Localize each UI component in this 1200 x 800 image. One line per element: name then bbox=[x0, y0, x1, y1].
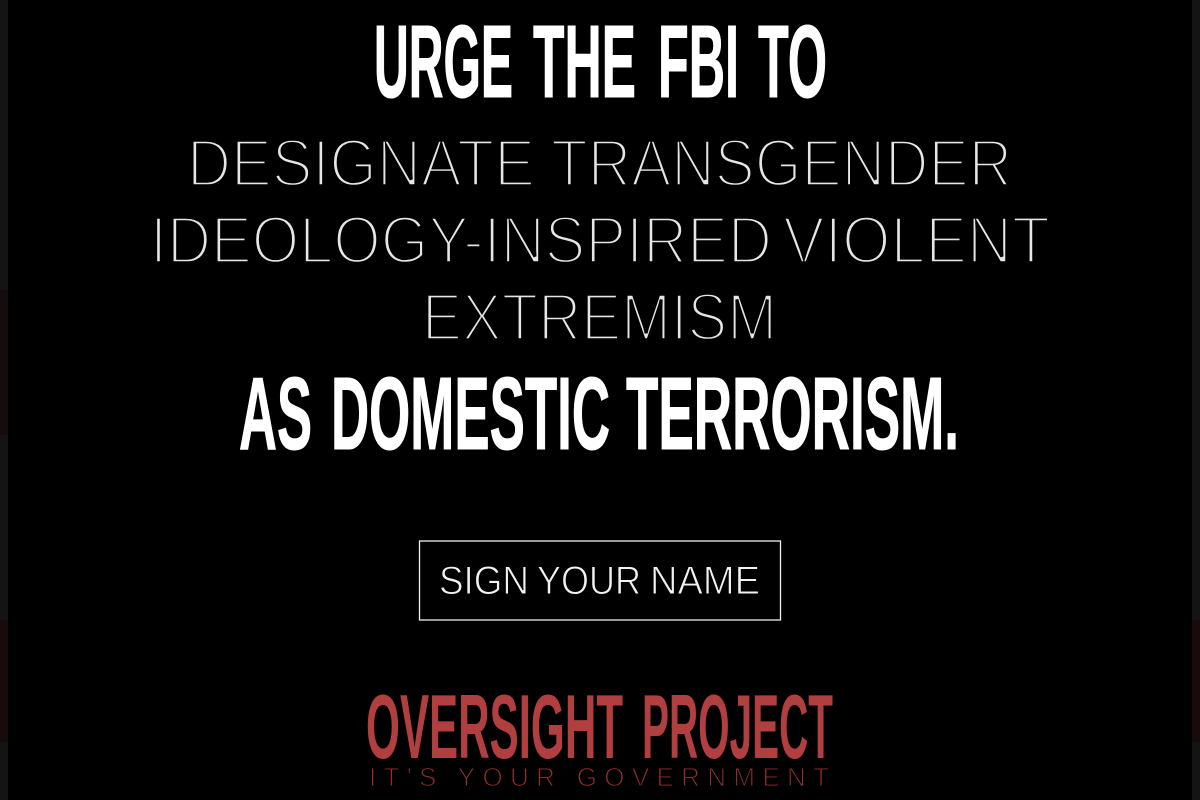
button: sign your name: YOUR bbox=[537, 559, 641, 603]
button: sign your name: NAME bbox=[650, 559, 760, 603]
subheading: designate transgender ideology-inspired violent extremism: IDEOLOGY-INSPIRED bbox=[150, 203, 772, 278]
button: sign your name: SIGN bbox=[439, 559, 529, 603]
heading: urge the FBI to: FBI bbox=[658, 4, 739, 119]
subheading: designate transgender ideology-inspired violent extremism: TRANSGENDER bbox=[551, 126, 1012, 201]
heading: urge the FBI to: THE bbox=[533, 4, 636, 119]
text: PROJECT bbox=[642, 677, 833, 778]
subheading: designate transgender ideology-inspired violent extremism: VIOLENT bbox=[783, 203, 1050, 278]
subheading: designate transgender ideology-inspired violent extremism bbox=[150, 126, 1050, 355]
heading: as domestic terrorism: AS bbox=[239, 356, 312, 471]
subheading: designate transgender ideology-inspired violent extremism: EXTREMISM bbox=[422, 280, 777, 355]
heading: urge the FBI to bbox=[374, 4, 827, 119]
text: TO bbox=[758, 4, 827, 119]
logo: oversight project: OVERSIGHT bbox=[366, 677, 623, 778]
left background strip bbox=[0, 0, 8, 800]
heading: urge the FBI to: URGE bbox=[374, 4, 513, 119]
subheading: designate transgender ideology-inspired violent extremism: DESIGNATE bbox=[187, 126, 535, 201]
button: sign your name bbox=[420, 541, 780, 620]
right background strip bbox=[1192, 0, 1200, 800]
logo: oversight project: IT'S YOUR GOVERNMENT bbox=[369, 762, 829, 792]
heading: as domestic terrorism: DOMESTIC bbox=[331, 356, 610, 471]
